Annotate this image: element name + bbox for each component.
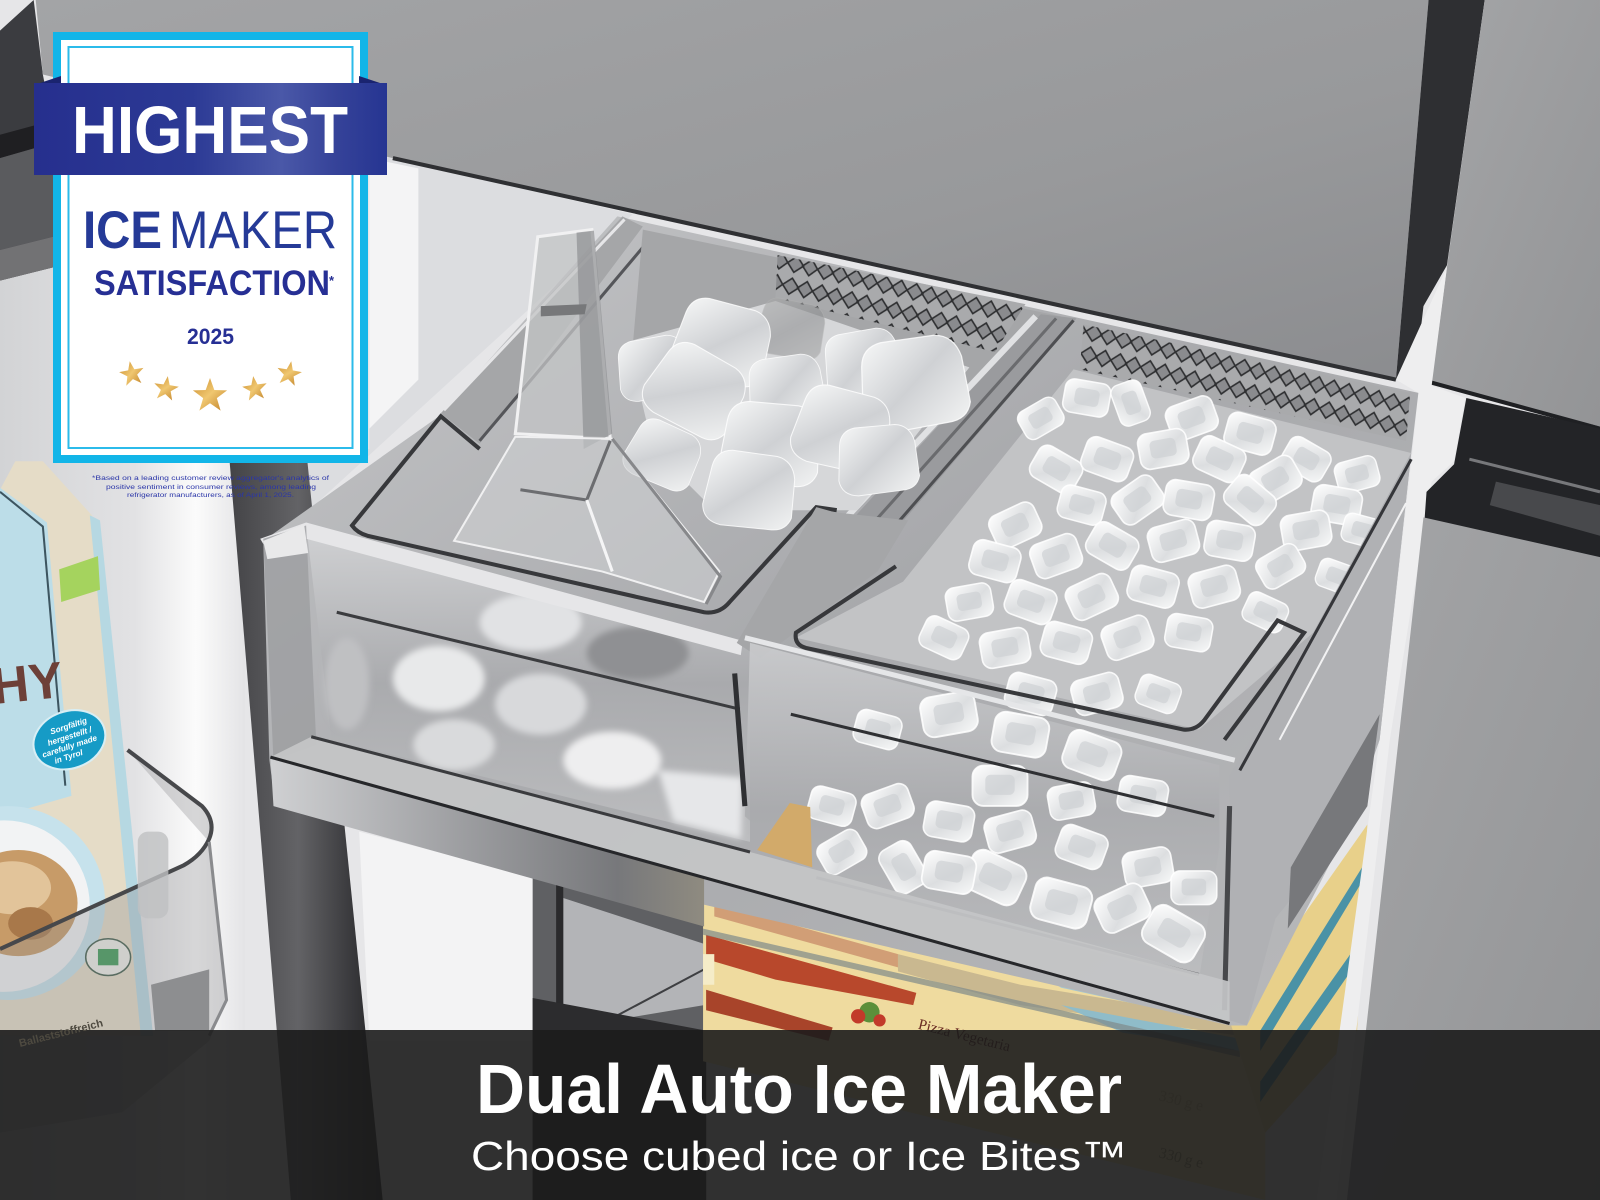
footnote: *Based on a leading customer review aggregator's analytics of — [92, 475, 329, 482]
weight label upper: 330 g e — [1157, 1087, 1205, 1115]
weight label lower: 330 g e — [1157, 1145, 1205, 1172]
window onto pizza box — [757, 803, 812, 867]
dark recess — [1424, 398, 1600, 559]
right drawer side — [1230, 453, 1411, 1026]
white frame strip — [1316, 267, 1465, 1200]
footnote — [92, 475, 329, 499]
ICEMAKER: MAKER — [169, 201, 337, 260]
ice drawer assembly — [260, 216, 1418, 1026]
lower ice bites — [805, 690, 1217, 967]
cubed ice — [613, 292, 973, 534]
left side rail — [441, 216, 643, 444]
right lower panel — [1347, 517, 1600, 1200]
left drawer front — [306, 526, 750, 842]
award badge — [34, 32, 387, 499]
center partition — [737, 507, 908, 658]
cereal box — [0, 461, 153, 1036]
asterisk: * — [329, 273, 335, 288]
center divider — [842, 314, 1077, 551]
left grill — [776, 255, 1026, 352]
white wall highlight — [369, 158, 418, 429]
cereal box: carefully made — [41, 733, 99, 760]
left compartment back wall — [633, 230, 1061, 408]
door bottom edge — [393, 158, 1396, 380]
right drawer front — [745, 643, 1219, 980]
chrome reflection band — [270, 757, 704, 927]
scoop — [454, 230, 720, 604]
inner wall beside drawer — [237, 153, 633, 541]
left lower ice blobs — [324, 594, 743, 839]
footnote: refrigerator manufacturers, as of April 1, 2025. — [127, 492, 294, 499]
door side dark edge — [1396, 0, 1485, 386]
recess textured strip — [1490, 482, 1600, 536]
recess light edge — [1469, 459, 1600, 492]
five stars — [118, 359, 303, 411]
dark door gasket — [229, 449, 383, 1200]
white lower interior — [359, 832, 536, 1041]
bottom caption bar — [0, 1017, 1600, 1200]
cereal box: in Tyrol — [53, 748, 85, 766]
lower compartment — [533, 869, 706, 1200]
badge frame — [53, 32, 368, 463]
sticker text: Sorgfältig — [49, 716, 88, 736]
cereal box: hergestellt / — [46, 725, 93, 748]
pizza crust strips — [706, 935, 916, 1005]
left lower tier rim — [337, 612, 740, 709]
pizza boxes — [703, 824, 1367, 1200]
bottom tray frame — [270, 737, 1230, 1023]
door bin — [0, 750, 227, 1133]
right upper panel — [1432, 0, 1600, 427]
footnote: positive sentiment in consumer reviews, among leading — [106, 484, 316, 491]
ice bites — [796, 369, 1411, 730]
refrigerator interior wall — [0, 267, 245, 1200]
left drawer handle corner — [260, 522, 743, 655]
HIGHEST: HIGHEST — [72, 93, 348, 168]
fibre label: Ballaststoffreich — [18, 1017, 105, 1050]
year: 2025 — [187, 324, 234, 349]
left drawer rim line — [352, 416, 837, 613]
ICEMAKER — [83, 201, 337, 260]
right grill — [1080, 324, 1410, 441]
SATISFACTION: SATISFACTION — [94, 264, 330, 303]
right drawer rim line — [796, 566, 1304, 740]
subtitle: Choose cubed ice or Ice Bites™ — [471, 1133, 1127, 1179]
top-left dark door edge — [0, 0, 53, 281]
ICEMAKER: ICE — [83, 201, 162, 260]
drawer back silhouette — [263, 216, 1418, 1026]
main door panel — [36, 0, 1429, 380]
ribbon — [40, 76, 61, 83]
cereal bowl — [0, 806, 105, 1000]
title: Dual Auto Ice Maker — [476, 1050, 1122, 1128]
pizza box label: Pizza Vegetaria — [916, 1016, 1012, 1055]
